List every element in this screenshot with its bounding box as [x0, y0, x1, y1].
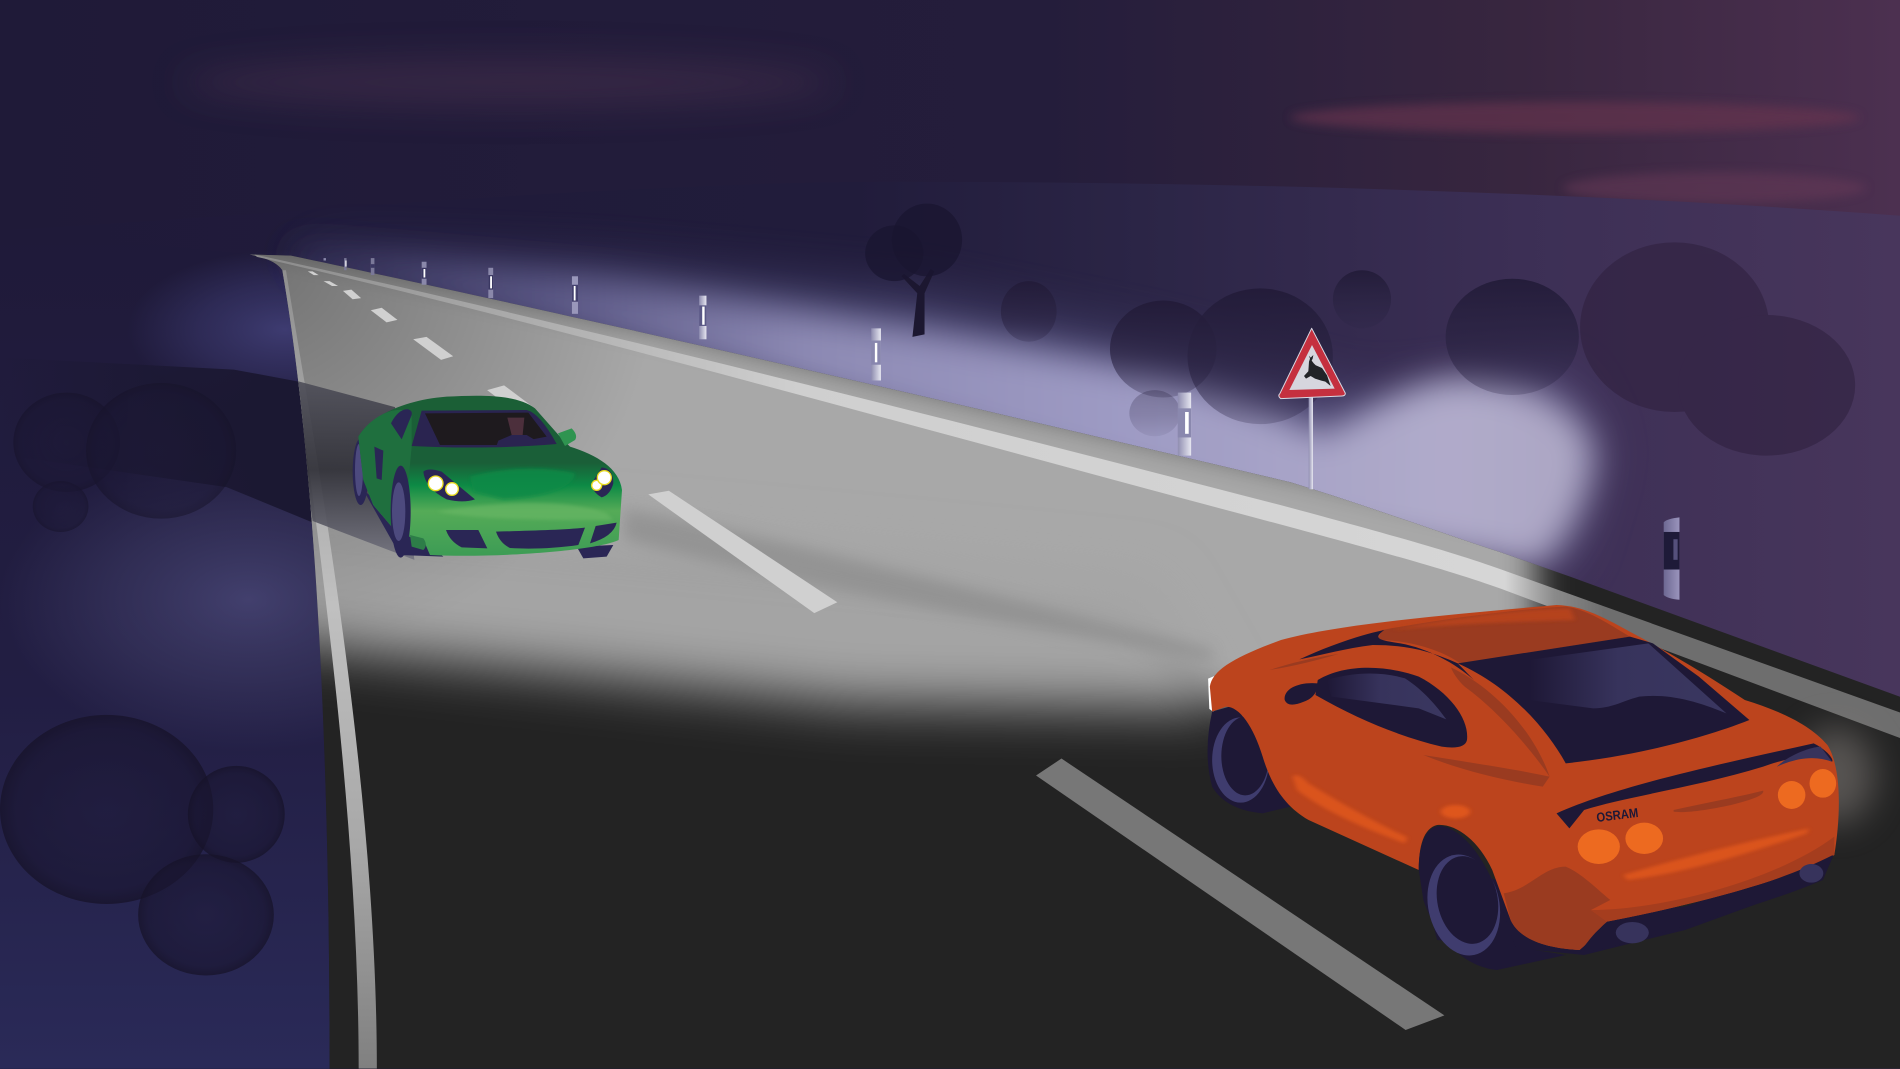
near delineator post: [1664, 517, 1679, 600]
road sign: [1279, 328, 1345, 489]
tree with trunk: [865, 204, 962, 337]
bumper highlight: [437, 503, 613, 520]
brand badge: OSRAM: [1596, 805, 1639, 825]
lit road dash: [648, 491, 837, 613]
front wheel: [1208, 705, 1290, 813]
trees far right: [1580, 242, 1855, 456]
orange car: [1208, 605, 1839, 970]
lower rear valance: [1579, 855, 1833, 953]
left headlight housing: [423, 469, 475, 501]
pillar shadow: [1451, 667, 1550, 777]
trees bottom left: [0, 715, 285, 975]
side vent: [374, 447, 383, 480]
side highlight: [1292, 775, 1407, 843]
exhaust left: [1616, 922, 1649, 943]
roof highlight: [1391, 608, 1575, 630]
right headlight housing: [592, 467, 613, 497]
wide soft glow of beam: [303, 257, 1599, 570]
door highlight: [1441, 805, 1470, 818]
rear tyre: [353, 438, 369, 505]
underbody: [1272, 787, 1834, 955]
side window: [391, 409, 412, 439]
roof rail: [1299, 630, 1474, 680]
bonnet highlight: [470, 469, 575, 499]
streak shadow: [624, 509, 1212, 660]
near road dash: [1036, 759, 1444, 1030]
underbody: [363, 490, 443, 557]
front wing crease: [1270, 654, 1338, 670]
sign pole: [1309, 397, 1313, 489]
wing mirror: [1285, 683, 1318, 705]
tail lights right: [1778, 769, 1836, 809]
orange body: [1210, 605, 1839, 950]
lit road upper surface: [250, 254, 1561, 720]
trees left: [13, 383, 236, 532]
windscreen: [412, 410, 557, 448]
rear deck spoiler: [1557, 743, 1832, 828]
shadow band on left verge: [0, 357, 395, 553]
far road dashes: [308, 271, 533, 412]
rear windscreen glass: [1529, 643, 1726, 713]
trees behind sign: [1001, 270, 1579, 436]
roof panel: [1377, 607, 1630, 663]
green car: [353, 396, 622, 558]
lower light on left verge: [0, 448, 497, 751]
bumper shadow: [1591, 837, 1834, 922]
right front tyre: [577, 545, 613, 558]
shadow across road: [291, 379, 414, 560]
dark glass: [425, 413, 547, 445]
mirror: [558, 428, 576, 446]
left headlights: [428, 476, 458, 495]
rear windscreen: [1458, 637, 1749, 763]
side crease: [1423, 755, 1550, 787]
sign triangle: [1279, 328, 1345, 399]
tail lights left: [1578, 823, 1663, 864]
side window glass: [1327, 674, 1446, 719]
rear arch panel: [1504, 867, 1610, 950]
green body: [358, 396, 622, 556]
road: [250, 254, 1900, 1069]
lower fender blob: [410, 535, 426, 550]
left edge line: [282, 270, 377, 1069]
driver: [497, 418, 537, 445]
right headlights: [592, 471, 611, 490]
lit road lower fade: [121, 485, 1224, 709]
bumper intakes: [446, 523, 617, 549]
delineator posts: [324, 258, 1191, 456]
light beam on verge: [291, 248, 1593, 567]
tail crease: [1674, 791, 1763, 812]
front tyre: [391, 466, 411, 558]
sign inner panel: [1289, 345, 1335, 390]
right edge line: [254, 254, 1900, 738]
rear highlight: [1623, 828, 1809, 880]
spoiler highlight: [1777, 747, 1832, 767]
side window: [1315, 668, 1467, 747]
left verge: [0, 230, 330, 1069]
upper light on left verge: [127, 250, 442, 410]
white front edge light: [1208, 676, 1214, 712]
icon: deer: [1304, 355, 1331, 386]
exhaust right: [1799, 864, 1823, 883]
far road dimming: [250, 254, 587, 590]
rear wheel: [1419, 826, 1566, 970]
glow behind rear of car: [1797, 727, 1875, 824]
side panel shade: [358, 410, 412, 537]
